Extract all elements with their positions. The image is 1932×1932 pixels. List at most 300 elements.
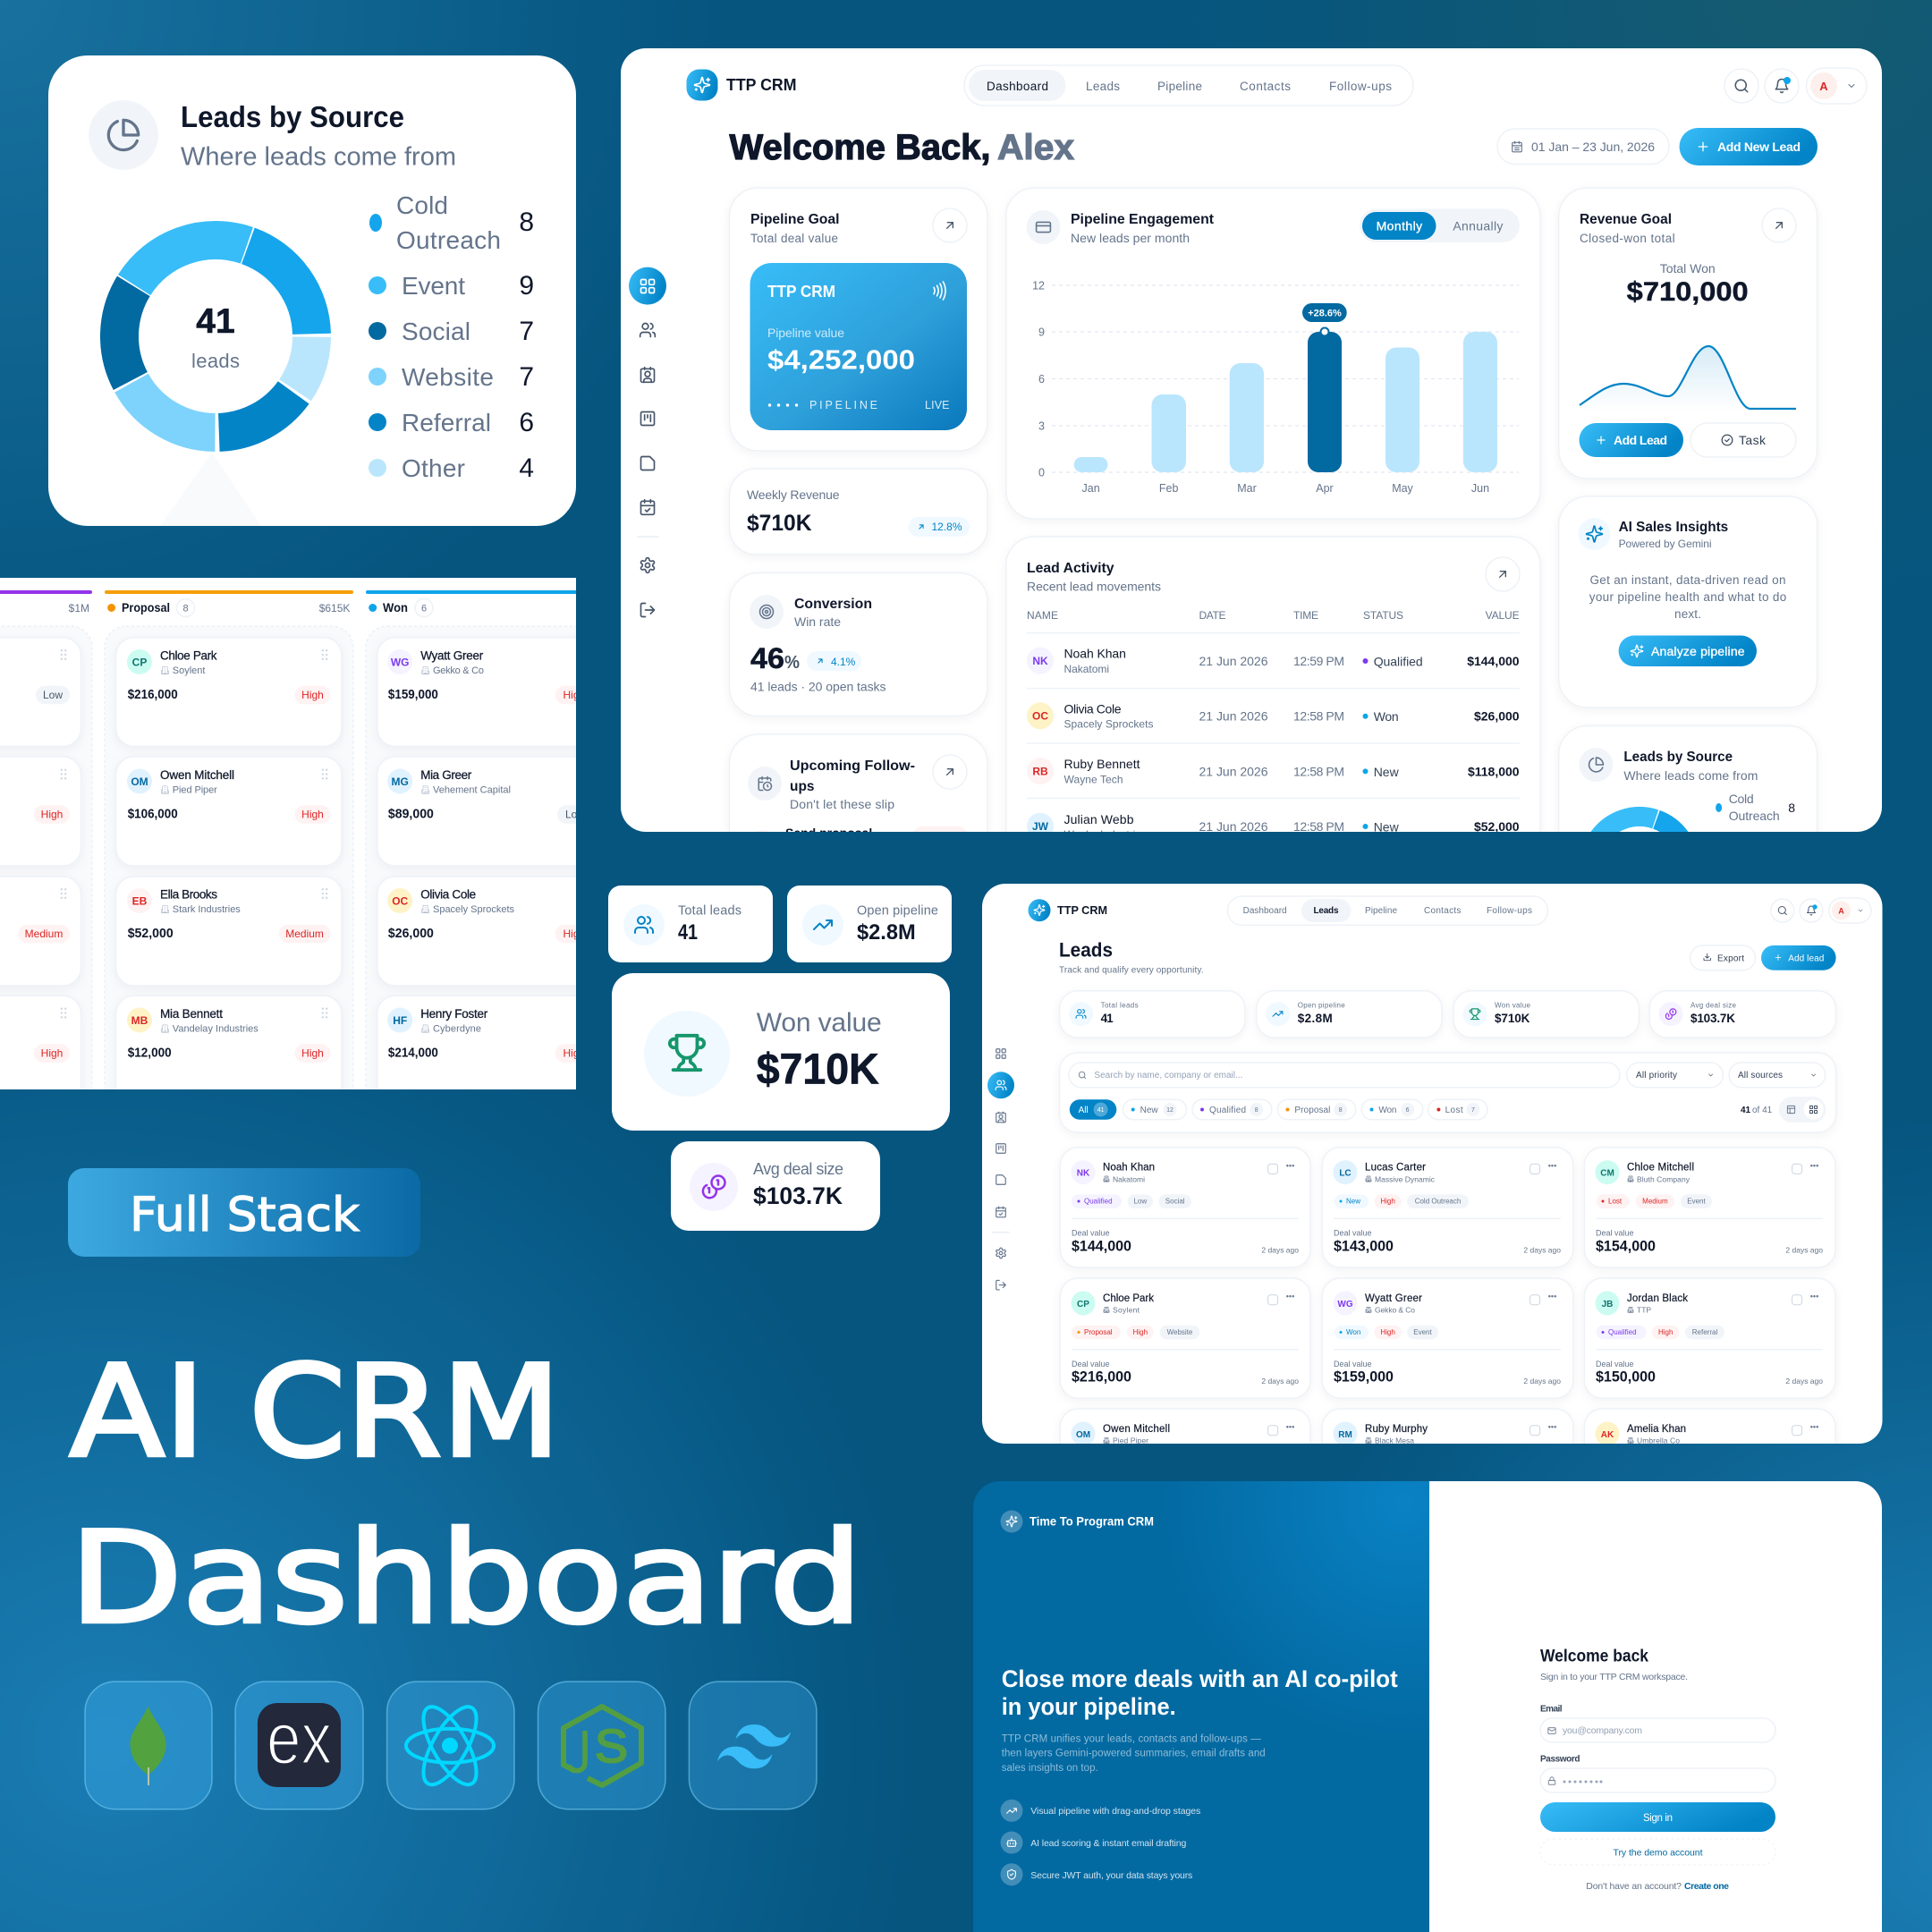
lead card: Chloe Mitchell: Event — [1687, 1198, 1707, 1206]
export button — [1690, 945, 1755, 970]
panel: revenue goal: Total Won — [1660, 261, 1716, 275]
stat cards row: Total leads — [1101, 1002, 1139, 1010]
panel: AI sales insights: Powered by Gemini — [1619, 538, 1712, 550]
column headers: 8 — [182, 603, 189, 614]
pipeline value card: PIPELINE — [809, 399, 877, 411]
panel: upcoming follow-ups: Upcoming Follow- — [790, 758, 915, 774]
stat: won value: Won value — [757, 1008, 882, 1038]
lead card: Chloe Mitchell: Medium — [1642, 1198, 1668, 1206]
navigation: Contacts — [1240, 80, 1291, 93]
filter bar: Search by name, company or email... — [1094, 1071, 1242, 1080]
task button — [1690, 423, 1796, 457]
lead card: Chloe Park: ••• — [1286, 1292, 1294, 1301]
lead card: Ruby Murphy: ••• — [1548, 1423, 1556, 1432]
panel: leads by source large — [48, 55, 576, 526]
row: Noah Khan: $144,000 — [1467, 654, 1520, 668]
panel: weekly revenue: 12.8% — [932, 521, 962, 533]
monthly annually toggle — [1360, 209, 1520, 242]
welcome heading — [728, 132, 1075, 165]
panel: leads by source small: 8 — [1788, 801, 1795, 815]
lead card: Ruby Murphy: Ruby Murphy — [1365, 1424, 1428, 1435]
login logo — [1000, 1510, 1154, 1533]
panel: weekly revenue: Weekly Revenue — [747, 487, 840, 502]
panel: lead activity table: STATUS — [1363, 609, 1403, 622]
pipeline value card: LIVE — [925, 399, 950, 411]
navigation — [1227, 896, 1547, 925]
hero paragraph — [1002, 1733, 1266, 1774]
stat: avg deal size: $103.7K — [753, 1182, 843, 1209]
row: Julian Webb: 12:58 PM — [1293, 819, 1344, 834]
welcome heading: Welcome Back, — [730, 128, 991, 167]
navigation: Dashboard — [987, 80, 1048, 93]
feature list: AI lead scoring & instant email drafting — [1030, 1838, 1186, 1849]
lead card: Lucas Carter: High — [1380, 1198, 1395, 1206]
lead card: Noah Khan: ••• — [1286, 1161, 1294, 1170]
row: Ruby Bennett: 12:58 PM — [1293, 764, 1344, 778]
lead card: Noah Khan: 2 days ago — [1261, 1246, 1299, 1255]
column headers: $1M — [69, 602, 89, 614]
lead card: Chloe Park: Website — [1167, 1328, 1193, 1336]
lead card: Chloe Mitchell: 2 days ago — [1785, 1246, 1823, 1255]
lead card: Chloe Park: 2 days ago — [1261, 1377, 1299, 1385]
panel: lead activity table: VALUE — [1486, 609, 1520, 622]
card: Henry Foster: $214,000 — [388, 1046, 438, 1061]
create account prompt: Don't have an account? — [1586, 1881, 1682, 1892]
filter bar: 8 — [1339, 1107, 1343, 1114]
panel: login screen — [973, 1481, 1882, 1932]
card: Henry Foster: High — [564, 1046, 585, 1059]
stat: total leads: 41 — [678, 920, 698, 945]
row: Olivia Cole: OC — [1032, 710, 1048, 723]
bar chart: 12 — [1032, 279, 1045, 292]
lead card: Chloe Mitchell: ••• — [1810, 1161, 1818, 1170]
lead card: Chloe Mitchell: $154,000 — [1596, 1238, 1656, 1254]
card: Owen Mitchell: $106,000 — [128, 807, 178, 821]
sign in button: Sign in — [1643, 1813, 1673, 1824]
stat: open pipeline — [787, 886, 952, 962]
card: Owen Mitchell: Owen Mitchell — [160, 768, 234, 782]
row: Julian Webb: Wonka Industries — [1064, 828, 1147, 841]
sign in form: Welcome back — [1540, 1648, 1648, 1666]
filter bar: 41 — [1741, 1106, 1751, 1115]
card: Wyatt Greer: Wyatt Greer — [420, 649, 484, 663]
stat cards row: Won value — [1495, 1002, 1531, 1010]
lead card: Wyatt Greer: Wyatt Greer — [1365, 1293, 1422, 1304]
lead card: Wyatt Greer — [1322, 1278, 1573, 1398]
filter bar: New — [1140, 1106, 1158, 1115]
stat: total leads — [608, 886, 773, 962]
stat: open pipeline: $2.8M — [857, 920, 916, 945]
panel: upcoming follow-ups: Don't let these slip — [790, 797, 894, 811]
card: Mia Greer — [377, 757, 603, 866]
row: Olivia Cole: $26,000 — [1474, 709, 1520, 724]
feature list: Visual pipeline with drag-and-drop stages — [1030, 1806, 1200, 1817]
sign in form — [1429, 1481, 1882, 1932]
card: Olivia Cole: Spacely Sprockets — [433, 904, 515, 915]
lead card: Chloe Park: Deal value — [1072, 1360, 1110, 1368]
row: Ruby Bennett: New — [1374, 765, 1400, 779]
filter bar: of 41 — [1752, 1106, 1773, 1115]
panel: lead activity table: NAME — [1027, 609, 1058, 622]
panel: leads by source small — [1559, 726, 1818, 936]
monthly annually toggle: Monthly — [1377, 219, 1422, 233]
lead card: Wyatt Greer: High — [1380, 1328, 1395, 1336]
bar chart: 3 — [1038, 420, 1045, 433]
icon: Express: ex — [267, 1699, 332, 1780]
column headers — [0, 590, 585, 617]
add lead button: Add lead — [1788, 953, 1824, 964]
donut chart — [81, 202, 350, 470]
lead card: Owen Mitchell: Owen Mitchell — [1103, 1424, 1170, 1435]
bar chart: +28.6% — [1308, 308, 1342, 318]
column 1 cards: Low — [43, 689, 63, 701]
row: Noah Khan: Qualified — [1374, 654, 1423, 668]
page heading — [1059, 938, 1204, 976]
filter bar: All — [1079, 1106, 1089, 1115]
lead card: Jordan Black: ••• — [1810, 1292, 1818, 1301]
lead card: Amelia Khan: AK — [1601, 1430, 1614, 1440]
lead card: Chloe Park: $216,000 — [1072, 1369, 1131, 1385]
card: Henry Foster — [377, 996, 603, 1130]
top right controls — [1724, 68, 1867, 104]
stat cards row: $2.8M — [1298, 1012, 1333, 1025]
page heading: Track and qualify every opportunity. — [1059, 966, 1204, 976]
filter bar: 41 — [1097, 1107, 1105, 1114]
lead card: Jordan Black: Deal value — [1596, 1360, 1634, 1368]
hero headline: in your pipeline. — [1002, 1693, 1176, 1720]
panel: lead activity table: DATE — [1199, 609, 1225, 622]
card: Mia Bennett: Mia Bennett — [160, 1007, 223, 1021]
lead card: Owen Mitchell: OM — [1076, 1430, 1090, 1440]
row: Noah Khan: 12:59 PM — [1293, 654, 1344, 668]
lead card: Jordan Black: $150,000 — [1596, 1369, 1656, 1385]
pipeline value card: Pipeline value — [767, 326, 844, 340]
card: Olivia Cole: High — [564, 928, 585, 940]
filter bar: All sources — [1738, 1071, 1783, 1080]
sign in button — [1540, 1802, 1775, 1832]
lead card: Amelia Khan: ••• — [1810, 1423, 1818, 1432]
card: Mia Bennett — [116, 996, 342, 1130]
lead card: Ruby Murphy: Black Mesa — [1375, 1436, 1414, 1445]
lead card: Lucas Carter: Massive Dynamic — [1375, 1174, 1436, 1183]
lead card: Noah Khan: Qualified — [1084, 1198, 1113, 1206]
navigation: Contacts — [1424, 906, 1461, 916]
add lead button — [1761, 945, 1836, 970]
card: Henry Foster: Cyberdyne — [433, 1023, 481, 1034]
column backgrounds — [0, 626, 634, 1163]
legend: 8 — [519, 208, 534, 237]
navigation: Leads — [1086, 80, 1120, 93]
column headers: $615K — [319, 602, 350, 614]
panel: weekly revenue: $710K — [747, 511, 812, 536]
lead card: Wyatt Greer: Deal value — [1334, 1360, 1372, 1368]
column 1 cards: Medium — [25, 928, 63, 940]
panel: lead activity table — [1005, 536, 1541, 832]
stat cards row: $710K — [1495, 1012, 1530, 1025]
panel: conversion: % — [784, 653, 800, 673]
add new lead button — [1680, 128, 1818, 165]
lead card: Chloe Mitchell: CM — [1600, 1169, 1614, 1179]
stat: avg deal size — [671, 1141, 880, 1231]
bar chart: 0 — [1038, 467, 1045, 479]
lead card: Wyatt Greer: 2 days ago — [1523, 1377, 1561, 1385]
lead card: Jordan Black: Jordan Black — [1627, 1293, 1688, 1304]
demo account button — [1540, 1839, 1775, 1865]
lead card: Lucas Carter: Lucas Carter — [1365, 1163, 1426, 1174]
lead card: Noah Khan: Noah Khan — [1103, 1163, 1155, 1174]
row: Noah Khan: NK — [1032, 655, 1048, 667]
row: Noah Khan — [1027, 647, 1520, 675]
icon: Node.js: S — [595, 1721, 628, 1773]
add lead button: Add Lead — [1614, 433, 1667, 447]
logo — [1029, 899, 1107, 921]
row: Olivia Cole: 12:58 PM — [1293, 709, 1344, 724]
stat: won value — [612, 973, 950, 1131]
logo: TTP CRM — [1057, 903, 1107, 917]
panel: conversion: 46 — [750, 642, 784, 674]
panel: revenue goal: $710,000 — [1627, 277, 1749, 307]
panel: pipeline board — [0, 578, 634, 1163]
panel: revenue goal: Revenue Goal — [1580, 212, 1672, 227]
lead card: Ruby Murphy — [1322, 1409, 1573, 1498]
monthly annually toggle: Annually — [1453, 219, 1503, 233]
logo — [687, 70, 796, 100]
logo: TTP CRM — [726, 76, 796, 94]
donut total: leads — [191, 350, 240, 372]
row: Julian Webb — [1027, 812, 1519, 832]
welcome heading: Alex — [997, 128, 1074, 167]
email field: you@company.com — [1563, 1725, 1642, 1736]
filter bar: 6 — [1406, 1107, 1410, 1114]
stat cards row: $103.7K — [1690, 1012, 1735, 1025]
column headers: Won — [383, 600, 408, 614]
card: Mia Bennett: MB — [131, 1014, 148, 1027]
navigation: Pipeline — [1365, 906, 1397, 916]
lead card: Wyatt Greer: Event — [1413, 1328, 1433, 1336]
stat: won value: $710K — [757, 1046, 879, 1094]
panel: lead activity table: TIME — [1293, 609, 1318, 622]
lead card: Chloe Mitchell: Bluth Company — [1637, 1174, 1690, 1183]
login hero panel — [973, 1481, 1429, 1932]
icon: React — [387, 1682, 514, 1809]
add lead button — [1580, 423, 1683, 457]
navigation: Pipeline — [1157, 80, 1202, 93]
stat cards row: Avg deal size — [1690, 1002, 1737, 1010]
main title: AI CRM — [70, 1339, 561, 1486]
lead card: Chloe Mitchell: Chloe Mitchell — [1627, 1163, 1694, 1174]
row: Ruby Bennett: RB — [1032, 765, 1048, 777]
column headers: Proposal — [122, 600, 170, 614]
email field — [1540, 1704, 1775, 1742]
icon: pie chart — [89, 100, 158, 170]
bar chart: Apr — [1316, 482, 1334, 495]
lead card: Lucas Carter: 2 days ago — [1523, 1246, 1561, 1255]
lead card: Wyatt Greer: Won — [1346, 1328, 1360, 1336]
lead card: Jordan Black: 2 days ago — [1785, 1377, 1823, 1385]
bar chart: 6 — [1038, 373, 1045, 386]
panel: AI sales insights: Analyze pipeline — [1651, 644, 1745, 658]
row: Ruby Bennett — [1027, 757, 1520, 785]
lead card: Wyatt Greer: $159,000 — [1334, 1369, 1394, 1385]
card: Mia Greer: Low — [565, 809, 585, 821]
pipeline value card — [750, 263, 967, 430]
panel: weekly revenue — [730, 469, 987, 555]
filter bar: 8 — [1255, 1107, 1258, 1114]
card: Chloe Park — [116, 638, 342, 746]
lead card: Noah Khan: Low — [1133, 1198, 1147, 1206]
panel: upcoming follow-ups: Send proposal — [785, 826, 872, 840]
column 1 cards: High — [41, 1046, 63, 1059]
lead card: Noah Khan: NK — [1077, 1169, 1090, 1179]
lead card: Wyatt Greer: WG — [1337, 1300, 1353, 1309]
lead card: Chloe Mitchell: Deal value — [1596, 1229, 1634, 1238]
password field: Password — [1540, 1754, 1580, 1764]
icon: Node.js — [538, 1682, 665, 1809]
card: Owen Mitchell: Pied Piper — [173, 785, 217, 796]
lead card: Jordan Black: High — [1658, 1328, 1673, 1336]
create account prompt: Create one — [1684, 1881, 1729, 1892]
card: Ella Brooks — [116, 877, 342, 986]
lead card: Noah Khan: $144,000 — [1072, 1238, 1131, 1254]
card: Mia Greer: Vehement Capital — [433, 785, 511, 796]
hero headline — [1002, 1665, 1398, 1720]
card: Mia Greer: $89,000 — [388, 807, 434, 821]
lead card: Jordan Black: JB — [1602, 1300, 1613, 1309]
panel: AI sales insights — [1559, 496, 1818, 708]
top right controls: A — [1838, 907, 1844, 916]
card: Wyatt Greer: High — [564, 689, 585, 701]
row: Noah Khan: Noah Khan — [1064, 647, 1126, 661]
badge: full stack: Full Stack — [130, 1188, 360, 1242]
row: Ruby Bennett: Ruby Bennett — [1064, 757, 1140, 771]
panel: conversion: 4.1% — [831, 656, 856, 668]
icon: Tailwind — [689, 1682, 817, 1809]
pipeline value card: TTP CRM — [767, 283, 835, 301]
icon: Express — [235, 1682, 363, 1809]
panel: AI sales insights: Get an instant, data-driven read on — [1590, 573, 1785, 587]
panel: leads by source small: Outreach — [1729, 809, 1780, 823]
legend: 7 — [519, 362, 534, 392]
panel: leads by source small: Leads by Source — [1623, 750, 1733, 765]
card: Mia Bennett: $12,000 — [128, 1046, 172, 1061]
bar chart: 9 — [1038, 326, 1045, 338]
stat: avg deal size: Avg deal size — [753, 1160, 843, 1178]
column 1 cards: High — [41, 809, 63, 821]
panel: AI sales insights: AI Sales Insights — [1619, 520, 1728, 535]
legend: Website — [402, 363, 494, 391]
date range — [1497, 129, 1669, 165]
lead card: Chloe Park: High — [1133, 1328, 1148, 1336]
panel: lead activity table: Lead Activity — [1027, 561, 1114, 576]
row: Julian Webb: Julian Webb — [1064, 812, 1134, 826]
card: Ella Brooks: $52,000 — [128, 927, 174, 941]
row: Julian Webb: JW — [1032, 820, 1049, 833]
card: Chloe Park: Soylent — [173, 665, 205, 676]
lead card: Chloe Park: CP — [1077, 1300, 1089, 1309]
panel: conversion: Conversion — [794, 597, 872, 612]
legend: 4 — [519, 453, 534, 483]
lead card: Owen Mitchell — [1060, 1409, 1310, 1498]
card: Chloe Park: CP — [132, 657, 147, 669]
lead card: Chloe Park: Proposal — [1084, 1328, 1113, 1336]
bar chart — [1032, 279, 1519, 495]
card: Wyatt Greer: $159,000 — [388, 688, 438, 702]
lead card: Amelia Khan — [1584, 1409, 1835, 1498]
card: Henry Foster: HF — [393, 1014, 407, 1027]
top right controls: A — [1819, 80, 1828, 93]
card: Owen Mitchell: High — [301, 809, 324, 821]
panel: pipeline goal: Pipeline Goal — [750, 212, 839, 227]
heading: Leads by Source — [181, 100, 404, 133]
card: Ella Brooks: Medium — [285, 928, 324, 940]
card: Mia Greer: Mia Greer — [420, 768, 472, 782]
lead card: Owen Mitchell: Pied Piper — [1113, 1436, 1148, 1445]
badge: full stack — [68, 1168, 420, 1257]
main title: Dashboard — [70, 1505, 862, 1652]
lead card: Owen Mitchell: ••• — [1286, 1423, 1294, 1432]
lead card: Lucas Carter: New — [1346, 1198, 1360, 1206]
lead card: Chloe Park — [1060, 1278, 1310, 1398]
panel: conversion — [730, 572, 987, 716]
panel: pipeline engagement: New leads per month — [1071, 231, 1190, 245]
date range: 01 Jan – 23 Jun, 2026 — [1531, 140, 1655, 154]
demo account button: Try the demo account — [1614, 1848, 1703, 1859]
navigation: Leads — [1313, 906, 1339, 916]
legend: Other — [402, 454, 465, 482]
panel: upcoming follow-ups: ups — [790, 779, 815, 794]
panel: leads by source small: Cold — [1729, 792, 1754, 806]
panel: pipeline engagement — [1006, 188, 1540, 519]
lead card: Lucas Carter: ••• — [1548, 1161, 1556, 1170]
filter bar: Lost — [1445, 1106, 1463, 1115]
login logo: Time To Program CRM — [1030, 1514, 1154, 1529]
tech stack icons — [85, 1682, 817, 1809]
card: Olivia Cole: $26,000 — [388, 927, 434, 941]
legend: 9 — [519, 271, 534, 301]
row: Olivia Cole: Won — [1374, 709, 1399, 724]
hero headline: Close more deals with an AI co-pilot — [1002, 1665, 1398, 1692]
filter bar: 12 — [1166, 1107, 1174, 1114]
navigation: Follow-ups — [1487, 906, 1532, 916]
feature list: Secure JWT auth, your data stays yours — [1030, 1870, 1192, 1881]
lead card: Noah Khan: Nakatomi — [1113, 1174, 1145, 1183]
sparkline — [1580, 346, 1796, 411]
lead card: Noah Khan — [1060, 1148, 1310, 1267]
legend: Event — [402, 272, 465, 300]
password field — [1540, 1754, 1775, 1792]
navigation: Dashboard — [1243, 906, 1287, 916]
email field: Email — [1540, 1704, 1563, 1714]
task button: Task — [1739, 433, 1767, 447]
lead card: Jordan Black: Referral — [1692, 1328, 1717, 1336]
panel: leads screen — [982, 884, 1882, 1498]
feature list — [1000, 1800, 1200, 1885]
sign in form: Sign in to your TTP CRM workspace. — [1540, 1672, 1688, 1682]
legend: Cold — [396, 191, 448, 219]
lead card: Chloe Park: Soylent — [1113, 1306, 1140, 1315]
donut total — [191, 302, 240, 372]
bar chart: Jan — [1082, 482, 1100, 495]
row: Julian Webb: $52,000 — [1474, 819, 1520, 834]
card: Ella Brooks: EB — [132, 894, 148, 907]
subheading: Where leads come from — [181, 143, 456, 172]
legend: Outreach — [396, 226, 501, 254]
sidebar — [629, 267, 666, 617]
row: Noah Khan: Nakatomi — [1064, 663, 1109, 675]
lead card: Wyatt Greer: Gekko & Co — [1375, 1306, 1415, 1315]
icon: MongoDB leaf — [85, 1682, 212, 1809]
create account prompt — [1586, 1881, 1729, 1892]
